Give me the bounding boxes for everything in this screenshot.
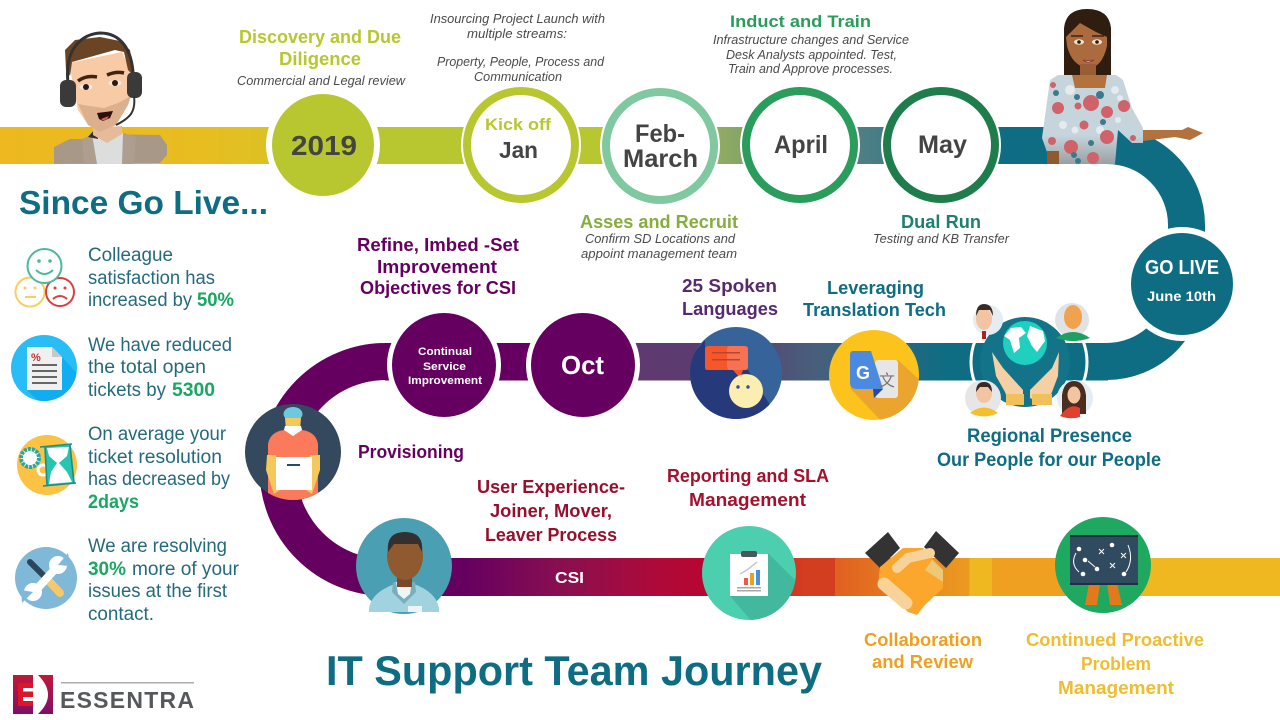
heading: induct and train: Train and Approve processes. bbox=[728, 62, 893, 76]
stat: ticket resolution: ticket resolution bbox=[88, 447, 222, 468]
icon: service desk agent bbox=[356, 518, 452, 614]
journey path bbox=[0, 127, 1280, 596]
stat: first contact resolution bbox=[88, 536, 240, 625]
icon: google translate: G bbox=[856, 363, 870, 383]
circle: May: May bbox=[918, 131, 967, 159]
text: insourcing project launch: Insourcing Project Launch with bbox=[430, 12, 605, 26]
heading: 25 spoken languages: Languages bbox=[682, 299, 778, 319]
stat: open tickets: 5300 bbox=[172, 380, 215, 401]
heading: continued proactive problem management bbox=[1026, 630, 1204, 698]
icon: globe in hands with regional people bbox=[965, 303, 1093, 420]
heading: provisioning: Provisioning bbox=[358, 442, 464, 462]
stat: colleague satisfaction: 50% bbox=[197, 290, 234, 311]
heading: continued proactive problem management: Continued Proactive bbox=[1026, 630, 1204, 650]
heading: 25 spoken languages bbox=[682, 276, 778, 319]
heading: 25 spoken languages: 25 Spoken bbox=[682, 276, 777, 296]
heading: discovery and due diligence: Discovery and Due bbox=[239, 27, 401, 47]
heading: discovery and due diligence: Diligence bbox=[279, 49, 361, 69]
circle: continual service improvement: Continual bbox=[418, 346, 472, 358]
heading: regional presence: Regional Presence bbox=[967, 426, 1132, 447]
icon: provisioning delivery person bbox=[245, 404, 341, 502]
text: insourcing project launch: multiple streams: bbox=[467, 27, 567, 41]
circle: April bbox=[740, 85, 860, 205]
heading: refine and imbed bbox=[357, 235, 519, 298]
heading: reporting and SLA: Reporting and SLA bbox=[667, 466, 829, 486]
heading: discovery and due diligence bbox=[237, 27, 406, 88]
stat: first contact resolution: issues at the first bbox=[88, 581, 228, 602]
heading: asses and recruit: Asses and Recruit bbox=[580, 212, 738, 232]
icon: document bbox=[11, 335, 77, 401]
heading: reporting and SLA bbox=[667, 466, 829, 510]
circle: kick off Jan: Jan bbox=[499, 137, 538, 163]
heading: collaboration and review: Collaboration bbox=[864, 630, 982, 650]
text: insourcing project launch: Property, People, Process and bbox=[437, 55, 605, 69]
portrait: top right person bbox=[1055, 303, 1090, 341]
heading: dual run bbox=[873, 212, 1010, 246]
heading: refine and imbed: Objectives for CSI bbox=[360, 278, 516, 298]
circle: May bbox=[881, 85, 1001, 205]
heading: asses and recruit: appoint management team bbox=[581, 247, 737, 261]
icon: document: % bbox=[31, 352, 41, 364]
heading: refine and imbed: Refine, Imbed -Set bbox=[357, 235, 519, 255]
circle: go live: June 10th bbox=[1147, 288, 1216, 304]
text: insourcing project launch: Communication bbox=[474, 70, 562, 84]
circle: kick off Jan bbox=[461, 85, 581, 205]
icon: screwdriver and wrench bbox=[15, 547, 77, 609]
heading: asses and recruit bbox=[580, 212, 738, 261]
circle: Feb-March: March bbox=[623, 145, 698, 173]
icon: satisfaction faces bbox=[16, 249, 74, 306]
circle: kick off Jan: Kick off bbox=[485, 115, 551, 134]
stat: open tickets bbox=[88, 335, 232, 401]
circle: 2019 bbox=[266, 88, 380, 202]
heading: continued proactive problem management: Problem bbox=[1081, 654, 1151, 674]
stat: ticket resolution: has decreased by bbox=[88, 469, 230, 490]
circle: continual service improvement: Improvement bbox=[408, 375, 482, 387]
stat: ticket resolution: On average your bbox=[88, 424, 227, 445]
heading: collaboration and review: and Review bbox=[872, 652, 974, 672]
stat: first contact resolution: contact. bbox=[88, 604, 154, 625]
heading: user experience: Joiner, Mover, bbox=[490, 501, 612, 521]
circle: Feb-March: Feb- bbox=[635, 120, 685, 148]
icon: man with headset bbox=[54, 33, 167, 164]
circle: continual service improvement: Service bbox=[423, 361, 466, 373]
circle: go live: GO LIVE bbox=[1145, 257, 1219, 279]
heading: leveraging translation tech bbox=[803, 278, 946, 320]
heading: regional presence: Our People for our People bbox=[937, 450, 1161, 471]
stat: colleague satisfaction bbox=[88, 245, 234, 311]
heading: continued proactive problem management: Management bbox=[1058, 678, 1174, 698]
circle: 2019: 2019 bbox=[291, 130, 357, 161]
stat: open tickets: the total open bbox=[88, 357, 206, 378]
stat: colleague satisfaction: increased by bbox=[88, 290, 192, 311]
circle: April: April bbox=[774, 131, 828, 159]
heading: user experience: Leaver Process bbox=[485, 525, 617, 545]
heading: induct and train: Induct and Train bbox=[730, 12, 871, 31]
stat: first contact resolution: We are resolving bbox=[88, 536, 227, 557]
heading: induct and train bbox=[713, 12, 909, 76]
heading: discovery and due diligence: Commercial and Legal review bbox=[237, 74, 406, 88]
heading: leveraging translation tech: Leveraging bbox=[827, 278, 924, 298]
heading: refine and imbed: Improvement bbox=[377, 257, 497, 277]
circle: Oct: Oct bbox=[561, 350, 604, 380]
label: CSI on band: CSI bbox=[555, 570, 584, 587]
icon: handshake bbox=[865, 531, 959, 615]
icon: speech bubble and face bbox=[688, 327, 782, 425]
stat: ticket resolution bbox=[88, 424, 230, 513]
stat: open tickets: tickets by bbox=[88, 380, 166, 401]
heading: induct and train: Infrastructure changes and Service bbox=[713, 33, 909, 47]
icon: report clipboard bbox=[702, 526, 800, 625]
icon: google translate: 文 bbox=[879, 372, 895, 390]
circle: Oct bbox=[526, 308, 640, 422]
portrait: bottom right person bbox=[1057, 380, 1093, 418]
heading: dual run: Testing and KB Transfer bbox=[873, 232, 1010, 246]
stat: ticket resolution: 2days bbox=[88, 492, 139, 513]
heading: user experience bbox=[477, 477, 625, 545]
circle: go live bbox=[1125, 227, 1239, 341]
title: IT Support Team Journey bbox=[326, 647, 823, 694]
stat: first contact resolution: 30% bbox=[88, 559, 126, 580]
icon: google translate bbox=[829, 330, 919, 420]
stat: colleague satisfaction: Colleague bbox=[88, 245, 173, 266]
stat: colleague satisfaction: satisfaction has bbox=[88, 268, 215, 289]
circle: Feb-March bbox=[600, 86, 720, 206]
heading: asses and recruit: Confirm SD Locations and bbox=[585, 232, 736, 246]
logo: Essentra: ESSENTRA bbox=[60, 687, 194, 713]
heading: leveraging translation tech: Translation Tech bbox=[803, 300, 946, 320]
heading: regional presence bbox=[937, 426, 1161, 471]
icon: hourglass and gear bbox=[17, 435, 77, 495]
heading: induct and train: Desk Analysts appointed. Test, bbox=[726, 48, 897, 62]
stat: open tickets: We have reduced bbox=[88, 335, 232, 356]
icon: woman presenter bbox=[1042, 9, 1203, 164]
text: insourcing project launch bbox=[430, 12, 605, 84]
heading: user experience: User Experience- bbox=[477, 477, 625, 497]
circle: continual service improvement bbox=[387, 308, 501, 422]
stat: first contact resolution: more of your bbox=[132, 559, 240, 580]
logo: Essentra bbox=[13, 675, 194, 714]
heading: dual run: Dual Run bbox=[901, 212, 981, 232]
heading: reporting and SLA: Management bbox=[689, 490, 806, 510]
heading: since go live: Since Go Live... bbox=[19, 184, 268, 221]
portrait: bottom left person bbox=[965, 380, 1001, 416]
heading: collaboration and review bbox=[864, 630, 982, 672]
portrait: top left person bbox=[973, 304, 1003, 339]
icon: tactics board bbox=[1055, 517, 1151, 613]
